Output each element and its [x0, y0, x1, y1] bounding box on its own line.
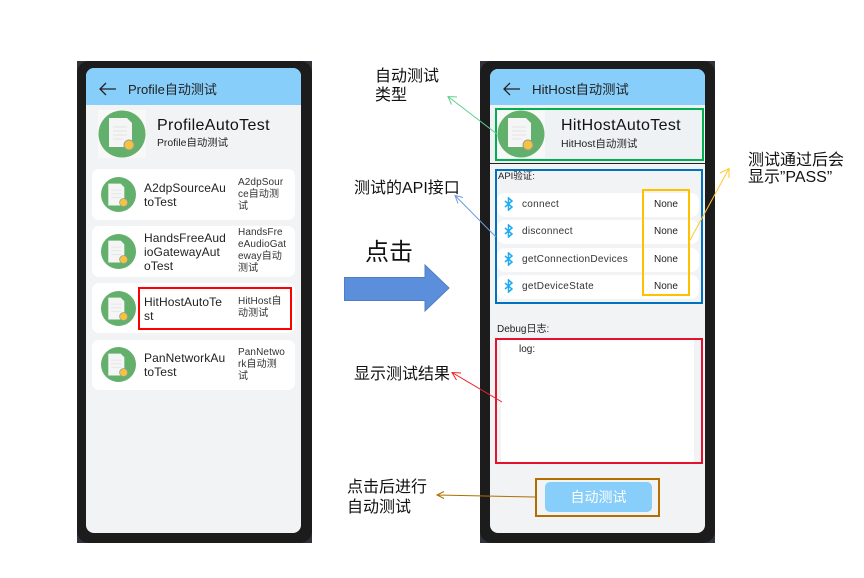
- description: PanNetwork: 试: [238, 371, 248, 382]
- sub heading: HitHost: HitHost自动测试: [561, 138, 637, 150]
- api name: disconnect: disconnect: [522, 226, 573, 237]
- annotation: API interface: 测试的API接口: [354, 180, 460, 197]
- name: PanNetwork: toTest: [144, 365, 177, 379]
- highlight box: log: [495, 338, 703, 464]
- description: HitHost: 动测试: [238, 308, 268, 319]
- arrow: click to test: [436, 491, 535, 499]
- sub heading: Profile: Profile自动测试: [157, 138, 228, 149]
- icon: bluetooth connect: [504, 197, 513, 211]
- arrow: test result: [451, 372, 502, 402]
- icon: right back arrow: [503, 82, 520, 96]
- annotation: test type: [375, 67, 439, 104]
- arrow: click direction: [344, 264, 450, 312]
- panel: test type header: [490, 105, 705, 164]
- arrow: API interface: [454, 194, 496, 238]
- left header bar: [86, 68, 301, 105]
- description: HitHost: [238, 295, 282, 319]
- name: HandsFree: HandsFreeAud: [144, 231, 226, 245]
- name: HitHost: [144, 295, 222, 323]
- annotation: PASS message: [748, 151, 844, 186]
- panel: right phone: [480, 61, 715, 543]
- description: A2dpSource: [238, 177, 284, 212]
- icon: bluetooth disconnect: [504, 224, 513, 238]
- api name: connect: connect: [522, 199, 559, 210]
- name: A2dpSource: [144, 181, 226, 209]
- highlight box: HitHost: [138, 287, 292, 330]
- icon: HitHost large: [497, 110, 545, 158]
- highlight box: results: [642, 189, 690, 296]
- name: A2dpSource: A2dpSourceAu: [144, 181, 226, 195]
- panel: log output: [501, 340, 694, 463]
- name: HandsFree: ioGatewayAut: [144, 245, 220, 259]
- description: A2dpSource: 试: [238, 201, 248, 212]
- description: HandsFree: 测试: [238, 263, 258, 274]
- left header title: Profile自动测试: [128, 82, 217, 97]
- icon: bluetooth getConnectionDevices: [504, 252, 513, 266]
- name: HitHost: HitHostAutoTe: [144, 295, 222, 309]
- card: A2dpSource: [92, 169, 295, 220]
- annotation: test type: 自动测试: [375, 68, 439, 85]
- description: HandsFree: [238, 227, 286, 274]
- description: HandsFree: eway自动: [238, 251, 282, 262]
- arrow: PASS message: [688, 168, 730, 242]
- panel: right phone screen: [490, 69, 705, 533]
- icon: profile large: [98, 110, 146, 158]
- panel: left phone: [77, 61, 312, 543]
- description: HandsFree: HandsFre: [238, 227, 283, 238]
- log text: log:: [519, 344, 535, 355]
- name: PanNetwork: [144, 351, 225, 379]
- heading: HitHostAutoTest: HitHostAutoTest: [561, 117, 681, 134]
- annotation: click to test: 自动测试: [347, 499, 411, 516]
- annotation: PASS message: 测试通过后会: [748, 152, 844, 169]
- row: getConnectionDevices: [497, 248, 699, 272]
- description: PanNetwork: rk自动测: [238, 359, 277, 370]
- icon: A2dpSource: [101, 177, 136, 212]
- row: connect: [497, 193, 699, 217]
- name: HandsFree: oTest: [144, 259, 173, 273]
- name: PanNetwork: PanNetworkAu: [144, 351, 225, 365]
- name: HandsFree: [144, 231, 226, 273]
- api result: getDeviceState: None: [654, 281, 678, 292]
- annotation: PASS message: 显示”PASS”: [748, 169, 832, 186]
- annotation: test result: 显示测试结果: [354, 366, 450, 383]
- right header bar: [490, 69, 705, 105]
- description: PanNetwork: PanNetwo: [238, 347, 285, 358]
- icon: HandsFree: [101, 234, 136, 269]
- api result: disconnect: None: [654, 226, 678, 237]
- card: HandsFree: [92, 226, 295, 277]
- arrow: test type: [447, 96, 498, 134]
- name: HitHost: st: [144, 309, 154, 323]
- icon: left back arrow: [99, 82, 116, 96]
- card: PanNetwork: [92, 340, 295, 390]
- right header title: HitHost自动测试: [532, 82, 629, 97]
- description: A2dpSource: A2dpSour: [238, 177, 283, 188]
- button: auto test: 自动测试: [570, 489, 626, 505]
- button: auto test: [545, 482, 652, 512]
- card: HitHost: [92, 283, 295, 333]
- row: getDeviceState: [497, 275, 699, 299]
- description: PanNetwork: [238, 347, 285, 382]
- annotation: click to test: 点击后进行: [347, 479, 427, 496]
- highlight box: test type: [495, 108, 704, 161]
- icon: PanNetwork: [101, 347, 136, 382]
- label: click: 点击: [365, 239, 413, 266]
- icon: bluetooth getDeviceState: [504, 279, 513, 293]
- api name: getDeviceState: getDeviceState: [522, 281, 594, 292]
- highlight box: API list: [495, 169, 703, 304]
- panel: left phone screen: [86, 68, 301, 533]
- description: HitHost: HitHost自: [238, 296, 282, 307]
- annotation: test type: 类型: [375, 87, 407, 104]
- heading: ProfileAutoTest: ProfileAutoTest: [157, 117, 270, 134]
- annotation: click to test: [347, 478, 427, 516]
- api name: getConnectionDevices: getConnectionDevices: [522, 254, 628, 265]
- row: disconnect: [497, 220, 699, 244]
- icon: HitHost: [101, 291, 136, 326]
- description: A2dpSource: ce自动测: [238, 189, 279, 200]
- api result: getConnectionDevices: None: [654, 254, 678, 265]
- label: debug log: Debug日志:: [497, 324, 549, 335]
- description: HandsFree: eAudioGat: [238, 239, 286, 250]
- label: API verification: API验证:: [498, 171, 535, 182]
- name: A2dpSource: toTest: [144, 195, 177, 209]
- api result: connect: None: [654, 199, 678, 210]
- highlight box: button: [535, 478, 660, 517]
